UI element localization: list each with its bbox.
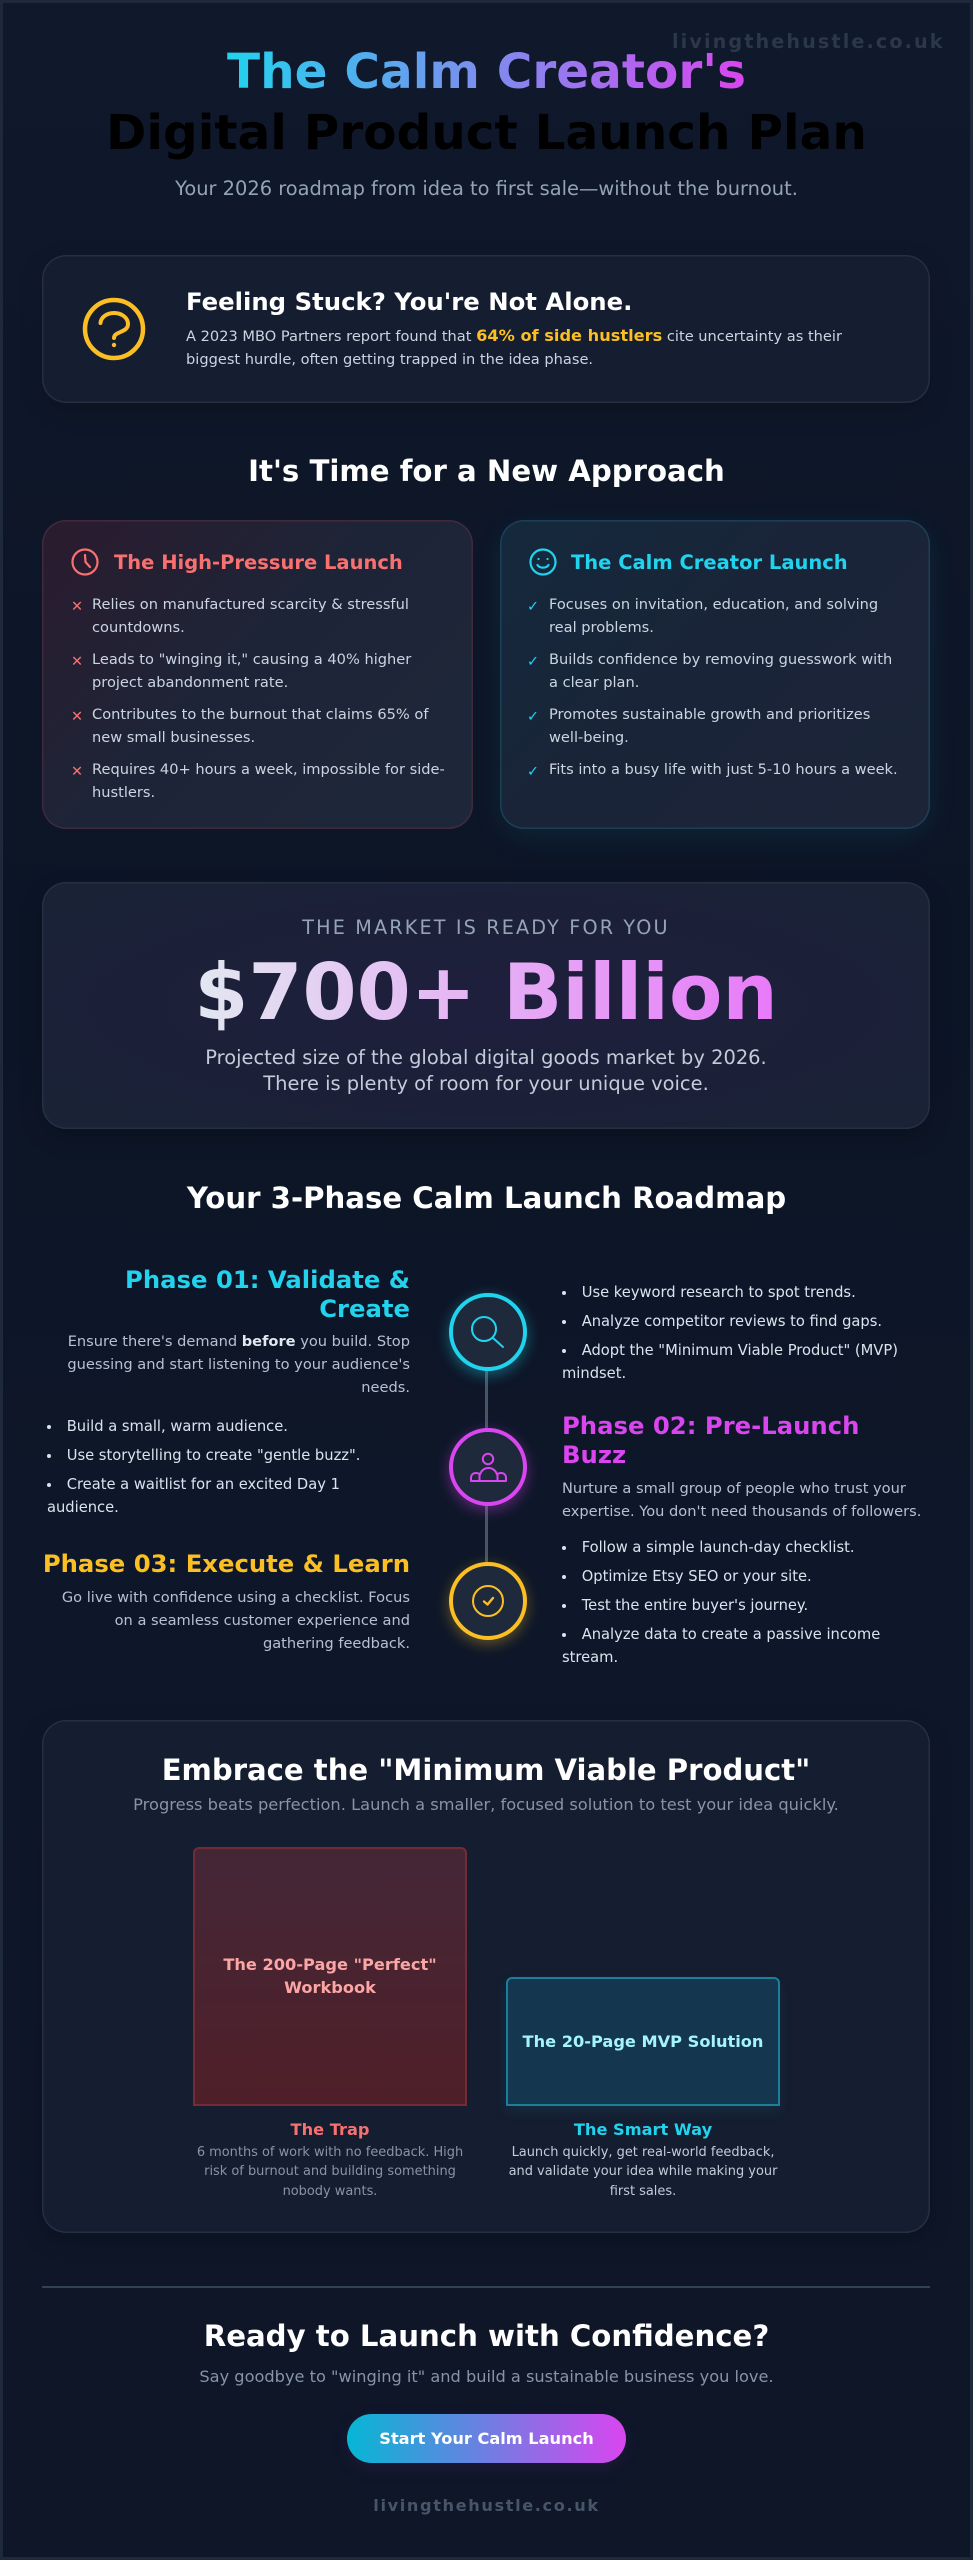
button: Start Your Calm Launch bbox=[379, 2429, 594, 2448]
phase 02 description: Nurture a small group of people who trust your bbox=[562, 1480, 906, 1496]
heading: Embrace the "Minimum Viable Product" bbox=[162, 1752, 810, 1786]
text block bbox=[186, 326, 842, 368]
phase 03 description bbox=[62, 1588, 410, 1652]
caption: the trap: The Trap bbox=[291, 2120, 369, 2139]
list: drawbacks: ✕ bbox=[71, 709, 83, 725]
title: Digital Product Launch Plan bbox=[106, 104, 867, 160]
caption: Projected size of the global digital goods market by 2026. bbox=[205, 1046, 767, 1068]
list: drawbacks: Relies on manufactured scarcity & stressful bbox=[92, 596, 409, 613]
caption: the smart way: and validate your idea while making your bbox=[509, 2164, 777, 2179]
list: drawbacks: ✕ bbox=[71, 654, 83, 670]
bar: 200-page workbook bbox=[193, 1847, 467, 2106]
list: drawbacks: ✕ bbox=[71, 764, 83, 780]
phase 01 heading: Create bbox=[319, 1294, 410, 1323]
list: drawbacks: countdowns. bbox=[92, 619, 185, 636]
phase 03 list: Test the entire buyer's journey. bbox=[582, 1596, 808, 1614]
caption bbox=[205, 1046, 767, 1094]
caption: the smart way: The Smart Way bbox=[574, 2120, 712, 2139]
label: THE MARKET IS READY FOR YOU bbox=[302, 916, 670, 938]
list: drawbacks: Contributes to the burnout that claims 65% of bbox=[92, 706, 428, 723]
caption: There is plenty of room for your unique voice. bbox=[263, 1072, 709, 1094]
panel: high-pressure launch bbox=[42, 520, 473, 829]
list: benefits: well-being. bbox=[549, 729, 629, 746]
text block: A 2023 MBO Partners report found that 64% of side hustlers cite uncertainty as their bbox=[186, 326, 842, 344]
icon: question mark bbox=[82, 298, 146, 360]
phase 02 list left column: Create a waitlist for an excited Day 1 bbox=[67, 1476, 340, 1493]
phase 02 list left column: Build a small, warm audience. bbox=[67, 1418, 288, 1435]
heading: The Calm Creator Launch bbox=[571, 550, 848, 574]
button bbox=[347, 2414, 626, 2463]
list: benefits bbox=[527, 596, 898, 780]
phase 01 description bbox=[67, 1333, 410, 1396]
phase 01 list bbox=[562, 1284, 898, 1382]
list: benefits: real problems. bbox=[549, 619, 654, 636]
phase 02 description: expertise. You don't need thousands of followers. bbox=[562, 1502, 921, 1520]
phase 03 list: Optimize Etsy SEO or your site. bbox=[582, 1568, 812, 1584]
icon: phase 3 check bbox=[449, 1562, 527, 1640]
phase 01 heading bbox=[125, 1265, 410, 1323]
phase 02 heading bbox=[562, 1411, 859, 1469]
icon: clock bbox=[71, 548, 99, 576]
phase 01 heading: Phase 01: Validate & bbox=[125, 1265, 410, 1294]
icon: phase 2 people bbox=[449, 1428, 527, 1506]
phase 01 list: Adopt the "Minimum Viable Product" (MVP) bbox=[582, 1342, 898, 1358]
list: benefits: ✓ bbox=[527, 764, 539, 780]
phase 02 description bbox=[562, 1480, 921, 1520]
phase 03 description: gathering feedback. bbox=[263, 1634, 410, 1652]
phase 02 heading: Phase 02: Pre-Launch bbox=[562, 1411, 859, 1440]
caption: the trap: nobody wants. bbox=[283, 2184, 377, 2198]
caption: the smart way bbox=[509, 2120, 778, 2198]
phase 01 list: Use keyword research to spot trends. bbox=[582, 1284, 856, 1300]
subtitle: Your 2026 roadmap from idea to first sale—without the burnout. bbox=[175, 177, 798, 200]
bar: 20-page MVP bbox=[506, 1977, 780, 2106]
icon: smiley bbox=[529, 548, 557, 576]
phase 01 description: needs. bbox=[361, 1379, 410, 1396]
phase 03 list: Analyze data to create a passive income bbox=[582, 1626, 880, 1642]
phase 01 list: Analyze competitor reviews to find gaps. bbox=[582, 1312, 882, 1330]
divider bbox=[42, 2286, 930, 2288]
call to action text: Say goodbye to "winging it" and build a sustainable business you love. bbox=[199, 2367, 774, 2386]
bar: 20-page MVP: The 20-Page MVP Solution bbox=[523, 2032, 763, 2051]
phase 02 list left column bbox=[47, 1418, 360, 1516]
phase 02 list left column: Use storytelling to create "gentle buzz". bbox=[67, 1447, 360, 1464]
list: benefits: Focuses on invitation, education, and solving bbox=[549, 596, 878, 613]
phase 01 list: mindset. bbox=[562, 1364, 626, 1382]
heading: ready to launch: Ready to Launch with Confidence? bbox=[204, 2319, 769, 2353]
list: benefits: ✓ bbox=[527, 654, 539, 670]
heading: The High-Pressure Launch bbox=[114, 550, 403, 574]
list: drawbacks: project abandonment rate. bbox=[92, 674, 288, 691]
heading: Feeling Stuck? You're Not Alone. bbox=[186, 286, 632, 316]
phase 01 description: Ensure there's demand before you build. Stop bbox=[68, 1333, 410, 1350]
list: benefits: Fits into a busy life with just 5-10 hours a week. bbox=[549, 761, 898, 778]
phase 01 description: guessing and start listening to your audience's bbox=[67, 1356, 410, 1373]
panel: feeling stuck bbox=[42, 255, 930, 403]
bar: 200-page workbook: The 200-Page "Perfect" bbox=[223, 1955, 437, 1974]
big number: $700+ Billion bbox=[194, 948, 778, 1038]
list: drawbacks bbox=[71, 596, 445, 801]
phase 03 description: Go live with confidence using a checklist. Focus bbox=[62, 1588, 410, 1606]
text block: biggest hurdle, often getting trapped in the idea phase. bbox=[186, 350, 593, 368]
phase 03 list: Follow a simple launch-day checklist. bbox=[582, 1538, 855, 1556]
panel: market stat bbox=[42, 882, 930, 1129]
caption: the trap bbox=[197, 2120, 463, 2198]
list: benefits: ✓ bbox=[527, 599, 539, 615]
panel: minimum viable product bbox=[42, 1720, 930, 2233]
subheading: Progress beats perfection. Launch a smaller, focused solution to test your idea quickly. bbox=[133, 1794, 839, 1814]
list: drawbacks: Leads to "winging it," causing a 40% higher bbox=[92, 651, 411, 668]
phase 02 list left column: audience. bbox=[47, 1499, 119, 1516]
bar: 200-page workbook: Workbook bbox=[284, 1978, 376, 1997]
list: drawbacks: new small businesses. bbox=[92, 729, 255, 746]
caption: the trap: 6 months of work with no feedback. High bbox=[197, 2144, 463, 2160]
heading: new approach: It's Time for a New Approach bbox=[248, 454, 725, 488]
title bbox=[106, 44, 867, 160]
watermark: livingthehustle.co.uk bbox=[672, 30, 945, 53]
phase 03 list bbox=[562, 1538, 880, 1666]
phase 03 heading: Phase 03: Execute & Learn bbox=[43, 1549, 410, 1578]
phase 03 list: stream. bbox=[562, 1648, 618, 1666]
list: benefits: Builds confidence by removing guesswork with bbox=[549, 651, 892, 668]
caption: the trap: risk of burnout and building something bbox=[204, 2164, 456, 2179]
icon: phase 1 search bbox=[449, 1293, 527, 1371]
heading: roadmap: Your 3-Phase Calm Launch Roadmap bbox=[187, 1181, 786, 1215]
list: benefits: ✓ bbox=[527, 709, 539, 725]
caption: the smart way: Launch quickly, get real-world feedback, bbox=[512, 2144, 774, 2160]
caption: the smart way: first sales. bbox=[610, 2184, 676, 2198]
roadmap connector line bbox=[485, 1365, 488, 1575]
footer url: livingthehustle.co.uk bbox=[373, 2496, 600, 2515]
phase 03 description: on a seamless customer experience and bbox=[115, 1612, 410, 1628]
list: drawbacks: hustlers. bbox=[92, 784, 155, 801]
phase 02 heading: Buzz bbox=[562, 1440, 626, 1469]
list: drawbacks: ✕ bbox=[71, 599, 83, 615]
list: benefits: Promotes sustainable growth and prioritizes bbox=[549, 706, 870, 723]
title: The Calm Creator's bbox=[227, 44, 746, 100]
list: drawbacks: Requires 40+ hours a week, impossible for side- bbox=[92, 761, 445, 778]
panel: calm creator launch bbox=[500, 520, 930, 829]
list: benefits: a clear plan. bbox=[549, 674, 639, 691]
